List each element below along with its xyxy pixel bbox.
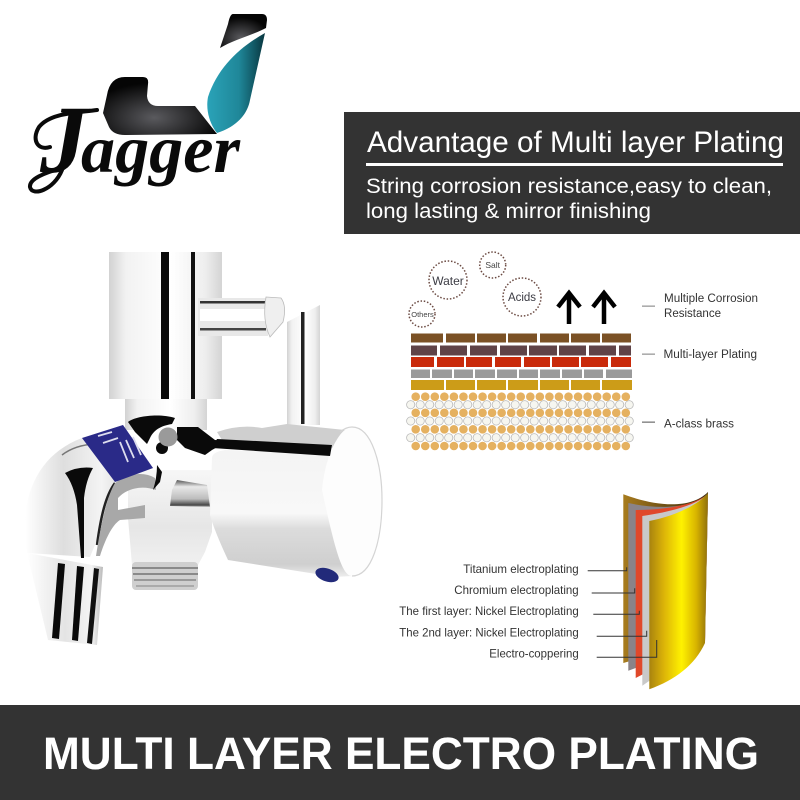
layer: red bricks — [411, 357, 631, 367]
layer: brown bricks — [411, 334, 631, 342]
banner: bottom title — [0, 705, 800, 800]
panel heading: Advantage of Multi layer Plating — [367, 126, 784, 159]
faucet: thread — [132, 562, 198, 590]
faucet: sparkle detail — [158, 428, 178, 446]
faucet: side handle — [198, 297, 285, 337]
faucet: lever base reflection — [217, 424, 345, 448]
label: Multiple Corrosion Resistance — [642, 293, 758, 320]
sheet: copper — [649, 493, 708, 689]
sheet: first nickel — [636, 494, 708, 678]
arrow: up left — [558, 293, 580, 324]
faucet: blue tip — [314, 565, 340, 585]
logo swash — [30, 110, 97, 192]
banner text: MULTI LAYER ELECTRO PLATING — [43, 728, 759, 779]
sheet: second nickel — [642, 494, 708, 686]
layer: plum bricks — [411, 346, 631, 356]
corrosion agent: Water: Water — [432, 274, 464, 288]
faucet: neck — [125, 396, 207, 430]
label: Electro-coppering: Electro-coppering — [489, 647, 579, 661]
label: Titanium electroplating: Titanium electroplating — [463, 562, 579, 576]
faucet: blue band — [82, 425, 153, 482]
corrosion agent: Others: Others — [411, 310, 434, 319]
faucet: connector — [170, 480, 210, 507]
layer: grey bricks — [411, 370, 632, 378]
faucet: nozzle — [27, 553, 103, 645]
label: second nickel layer: The 2nd layer: Nickel Electroplating — [399, 626, 579, 640]
logo mark: black tip — [220, 14, 267, 48]
label: first nickel layer: The first layer: Nickel Electroplating — [399, 604, 579, 618]
panel description: String corrosion resistance,easy to clean, — [366, 174, 772, 198]
layer: brass atoms — [411, 397, 630, 446]
faucet: upper cylinder — [109, 252, 222, 399]
faucet: central black reflections — [128, 415, 228, 490]
corrosion agent: Water — [429, 261, 467, 299]
logo mark: teal blade — [207, 33, 265, 133]
diagram: electroplating layers — [399, 492, 708, 689]
label: Multiple Corrosion Resistance: Multiple Corrosion — [664, 293, 758, 305]
panel: advantage header — [344, 112, 800, 234]
faucet: spout — [25, 425, 156, 558]
leader lines — [588, 567, 657, 657]
faucet: black band across body — [212, 439, 332, 456]
diagram: multi-layer plating cross section — [409, 252, 758, 446]
faucet: lever — [287, 305, 320, 425]
layer: gold bricks — [411, 380, 632, 390]
logo wordmark: agger — [81, 111, 241, 187]
label: Multiple Corrosion Resistance: Resistance — [664, 308, 721, 320]
corrosion agent: Others — [409, 301, 435, 327]
faucet: lower valve body — [128, 470, 212, 565]
logo wordmark: J — [39, 86, 91, 193]
arrow: up right — [593, 293, 615, 324]
corrosion agent: Salt: Salt — [485, 260, 501, 270]
label: Chromium electroplating: Chromium electroplating — [454, 583, 579, 597]
sheet: chromium — [628, 493, 708, 671]
corrosion agent: Acids — [503, 278, 541, 316]
corrosion agent: Salt — [480, 252, 506, 278]
logo: Jagger — [30, 14, 267, 193]
product photo: chrome two-way faucet — [25, 252, 382, 645]
corrosion agent: Acids: Acids — [508, 292, 536, 304]
panel description: long lasting & mirror finishing — [366, 199, 651, 223]
faucet: main cylinder — [210, 427, 382, 577]
sheet: titanium — [623, 492, 708, 663]
label: Multi-layer Plating: Multi-layer Plating — [664, 349, 757, 361]
label: A-class brass: A-class brass — [664, 419, 734, 431]
logo mark: black J base — [103, 77, 217, 135]
